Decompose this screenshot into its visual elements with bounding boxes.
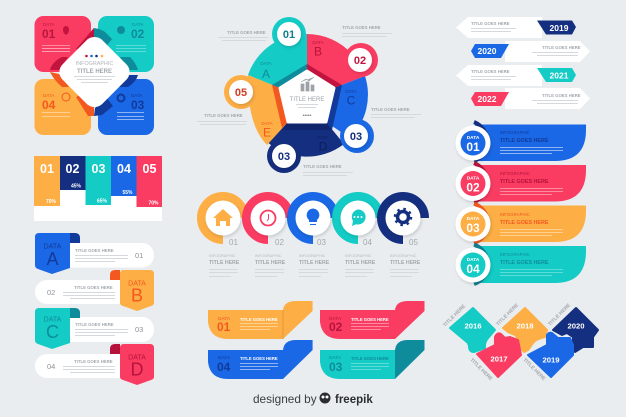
- icon: speech bubble: [352, 209, 366, 226]
- panel: pentagon pie chart: B: [314, 44, 322, 58]
- panel: pentagon pie chart: D: [319, 140, 328, 154]
- panel: five column percentage bars: 55%: [122, 190, 133, 196]
- panel: pentagon pie chart: DATA: [345, 89, 357, 94]
- panel: four folded banners: DATA: [218, 355, 231, 361]
- panel: puzzle arrows 2016-2020: 2017: [490, 354, 508, 364]
- panel: five circle process steps: TITLE HERE: [209, 260, 240, 266]
- panel: four folded banners: DATA: [329, 355, 342, 361]
- panel: four folded banners: 02: [329, 320, 343, 334]
- panel: four folded banners: TITLE GOES HERE: [351, 317, 389, 322]
- panel: data A-D ribbons: DATA: [128, 280, 146, 288]
- panel: data A-D ribbons: DATA: [128, 354, 146, 362]
- panel: puzzle arrows 2016-2020: TITLE HERE: [522, 357, 547, 383]
- quadrant labels: DATA: [43, 22, 54, 27]
- panel: five column percentage bars: [34, 156, 162, 221]
- panel: data tabs 01-04: INFOGRAPHIC: [500, 171, 530, 176]
- pie callout titles: TITLE GOES HERE: [371, 107, 410, 112]
- panel: pentagon pie chart: DATA: [261, 121, 273, 126]
- panel: puzzle arrows 2016-2020: TITLE HERE: [442, 303, 468, 328]
- quadrant labels: DATA: [132, 22, 143, 27]
- numbered badges: 05: [235, 87, 247, 99]
- panel: year arrows timeline: 2021: [550, 70, 569, 80]
- panel: five circle process steps: TITLE HERE: [299, 260, 330, 266]
- panel: puzzle arrows 2016-2020: TITLE HERE: [547, 302, 573, 327]
- panel: year arrows timeline: 2019: [550, 23, 569, 33]
- panel: five column percentage bars: 70%: [46, 199, 57, 205]
- panel: data tabs 01-04: 02: [466, 180, 480, 194]
- panel: four folded banners: DATA: [218, 316, 231, 322]
- panel: data tabs 01-04: DATA: [467, 257, 480, 263]
- panel: pentagon pie chart: [197, 17, 421, 176]
- centre pentagon: [280, 71, 334, 122]
- pie callout titles: TITLE GOES HERE: [204, 113, 243, 118]
- panel: pentagon pie chart: DATA: [317, 135, 329, 140]
- panel: five circle process steps: TITLE HERE: [390, 260, 421, 266]
- panel: five circle process steps: 01: [229, 238, 238, 247]
- panel: data A-D ribbons: 03: [135, 325, 143, 334]
- quadrant labels: 02: [131, 27, 145, 41]
- panel: year arrows timeline: TITLE GOES HERE: [471, 21, 510, 26]
- panel: five circle process steps: 02: [275, 238, 284, 247]
- panel: five circle process steps: INFOGRAPHIC: [390, 254, 417, 258]
- panel: data A-D ribbons: C: [46, 322, 59, 342]
- panel: data tabs 01-04: 03: [466, 221, 480, 235]
- panel: data A-D ribbons: A: [46, 249, 59, 269]
- quadrant labels: [42, 22, 146, 120]
- panel: data tabs 01-04: TITLE GOES HERE: [500, 179, 549, 185]
- panel: data A-D ribbons: DATA: [44, 316, 62, 324]
- numbered badges: 03: [350, 131, 362, 143]
- panel: data tabs 01-04: TITLE GOES HERE: [500, 138, 549, 144]
- footer: designed by freepik: freepik: [335, 394, 373, 406]
- panel: pentagon pie chart: C: [347, 94, 356, 108]
- panel: five column percentage bars: 02: [66, 162, 79, 176]
- panel: data tabs 01-04: TITLE GOES HERE: [500, 220, 549, 226]
- panel: five circle process steps: 03: [317, 238, 326, 247]
- panel: data A-D ribbons: TITLE GOES HERE: [75, 248, 114, 253]
- panel: five column percentage bars: 04: [117, 162, 131, 176]
- footer: designed by freepik: [253, 392, 373, 406]
- panel: four folded banners: [208, 301, 424, 379]
- panel: four folded banners: TITLE GOES HERE: [240, 356, 278, 361]
- panel: puzzle arrows 2016-2020: TITLE HERE: [469, 357, 494, 383]
- panel: five circle process steps: 05: [409, 238, 418, 247]
- panel: data tabs 01-04: INFOGRAPHIC: [500, 252, 530, 257]
- panel: data tabs 01-04: [456, 122, 586, 284]
- panel: puzzle arrows 2016-2020: TITLE HERE: [495, 302, 521, 327]
- icon: gear: [395, 209, 411, 225]
- panel: data tabs 01-04: 04: [466, 262, 480, 276]
- quadrant labels: 03: [131, 98, 145, 112]
- panel: data tabs 01-04: TITLE GOES HERE: [500, 260, 549, 266]
- white centre diamond: TITLE HERE: [77, 69, 112, 75]
- panel: five column percentage bars: 05: [143, 162, 156, 176]
- panel: puzzle arrows 2016-2020: [442, 302, 598, 383]
- pie callout titles: TITLE GOES HERE: [303, 164, 342, 169]
- panel: four folded banners: 03: [329, 360, 343, 374]
- panel: data A-D ribbons: [35, 233, 154, 385]
- panel: data A-D ribbons: D: [130, 360, 144, 380]
- panel: data tabs 01-04: INFOGRAPHIC: [500, 130, 530, 135]
- panel: year arrows timeline: TITLE GOES HERE: [471, 69, 510, 74]
- panel: year arrows timeline: TITLE GOES HERE: [542, 45, 581, 50]
- panel: data tabs 01-04: DATA: [467, 216, 480, 222]
- icon: light bulb: [307, 208, 319, 225]
- panel: five circle process steps: 04: [363, 238, 372, 247]
- panel: data tabs 01-04: DATA: [467, 135, 480, 141]
- pie callout titles: TITLE GOES HERE: [227, 30, 266, 35]
- panel: five circle process steps: INFOGRAPHIC: [255, 254, 282, 258]
- numbered badges: [224, 17, 378, 173]
- panel: data tabs 01-04: INFOGRAPHIC: [500, 212, 530, 217]
- centre pentagon: TITLE HERE: [290, 97, 324, 103]
- panel: five column percentage bars: 70%: [148, 200, 159, 206]
- icon: house: [213, 209, 233, 226]
- footer: designed by freepik: designed by: [253, 392, 317, 406]
- panel: data tabs 01-04: DATA: [467, 176, 480, 182]
- pie callout titles: TITLE GOES HERE: [342, 25, 381, 30]
- panel: five circle process steps: INFOGRAPHIC: [345, 254, 372, 258]
- panel: four folded banners: TITLE GOES HERE: [351, 356, 389, 361]
- panel: year arrows timeline: 2020: [478, 46, 497, 56]
- panel: pentagon pie chart: DATA: [312, 40, 324, 45]
- panel: five circle process steps: TITLE HERE: [345, 260, 376, 266]
- panel: data A-D ribbons: 02: [47, 288, 55, 297]
- panel: five column percentage bars: 65%: [97, 198, 108, 204]
- panel: four folded banners: 01: [217, 320, 231, 334]
- panel: five circle process steps: INFOGRAPHIC: [209, 254, 236, 258]
- white centre diamond: [55, 32, 134, 112]
- panel: data A-D ribbons: 01: [135, 251, 143, 260]
- quadrant labels: 04: [42, 98, 56, 112]
- panel: year arrows timeline: TITLE GOES HERE: [542, 93, 581, 98]
- white centre diamond: INFOGRAPHIC: [76, 61, 113, 67]
- panel: pentagon pie chart: A: [262, 67, 270, 81]
- panel: five circle process steps: TITLE HERE: [255, 260, 286, 266]
- quadrant labels: 01: [42, 27, 56, 41]
- panel: year arrows timeline: 2022: [478, 94, 497, 104]
- panel: data A-D ribbons: TITLE GOES HERE: [74, 359, 113, 364]
- panel: data A-D ribbons: DATA: [44, 244, 62, 250]
- panel: four folded banners: DATA: [329, 316, 342, 322]
- panel: data tabs 01-04: 01: [466, 140, 480, 154]
- panel: four-quadrant infographic: [34, 16, 154, 135]
- panel: pentagon pie chart: E: [263, 126, 271, 140]
- icon: clock: [260, 210, 276, 226]
- panel: pentagon pie chart: DATA: [260, 61, 272, 66]
- panel: puzzle arrows 2016-2020: 2016: [464, 322, 482, 330]
- panel: four folded banners: TITLE GOES HERE: [240, 317, 278, 322]
- panel: puzzle arrows 2016-2020: 2019: [542, 356, 560, 364]
- numbered badges: 01: [283, 29, 295, 41]
- panel: five circle process steps: [202, 196, 424, 277]
- panel: five circle process steps: INFOGRAPHIC: [299, 254, 326, 258]
- panel: year arrows timeline: [456, 17, 590, 109]
- panel: puzzle arrows 2016-2020: 2018: [516, 322, 534, 330]
- panel: data A-D ribbons: 04: [47, 362, 55, 371]
- numbered badges: 03: [278, 151, 290, 163]
- panel: five column percentage bars: 03: [92, 162, 105, 176]
- panel: four folded banners: 04: [217, 360, 231, 374]
- numbered badges: 02: [354, 55, 366, 67]
- panel: data A-D ribbons: TITLE GOES HERE: [74, 285, 113, 290]
- quadrant labels: DATA: [43, 93, 54, 98]
- panel: data A-D ribbons: B: [131, 286, 143, 306]
- centre pentagon: •••••: [303, 113, 312, 119]
- panel: data A-D ribbons: TITLE GOES HERE: [75, 322, 114, 327]
- panel: puzzle arrows 2016-2020: 2020: [567, 322, 585, 330]
- quadrant labels: DATA: [131, 93, 142, 98]
- panel: five column percentage bars: 45%: [71, 184, 82, 190]
- pie callout titles: [197, 25, 421, 176]
- panel: five column percentage bars: 01: [40, 162, 54, 176]
